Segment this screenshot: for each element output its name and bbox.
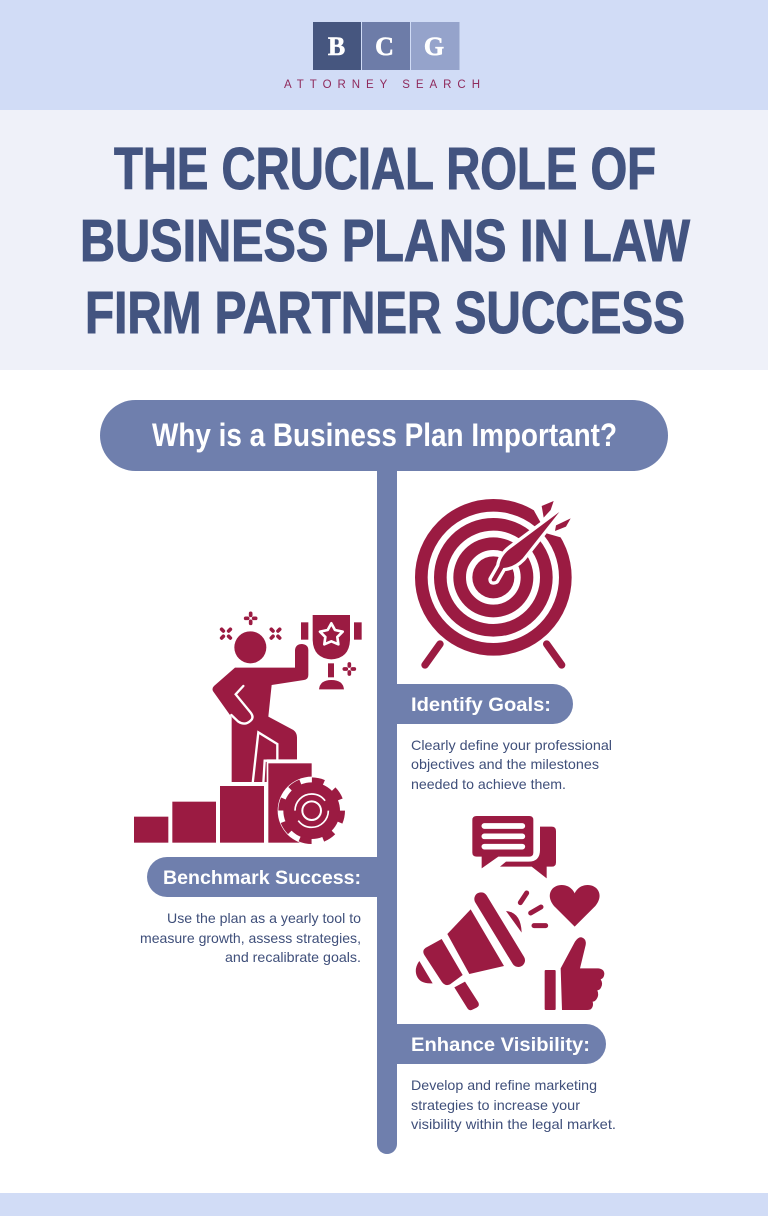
logo: BCG squares: G bbox=[424, 32, 444, 61]
vertical timeline stem bbox=[377, 460, 397, 1154]
logo wordmark: ATTORNEY SEARCH bbox=[284, 79, 480, 91]
description: measure growth, assess strategies, bbox=[140, 931, 361, 946]
label pill bbox=[397, 684, 573, 724]
title bbox=[80, 136, 690, 346]
footer band bbox=[0, 1193, 768, 1216]
title band bbox=[0, 110, 768, 370]
header band with logo bbox=[0, 0, 768, 110]
logo: BCG squares: C bbox=[375, 32, 394, 61]
icon: chat bubbles, megaphone, heart and thumbs up bbox=[416, 816, 604, 1010]
icon: person on steps with trophy and gear bbox=[134, 613, 362, 845]
chat bubbles bbox=[472, 816, 556, 878]
logo: BCG squares: B bbox=[328, 32, 345, 61]
description bbox=[411, 1078, 616, 1132]
trophy bbox=[301, 615, 362, 689]
description bbox=[411, 738, 612, 792]
label pill bbox=[147, 857, 377, 897]
description: objectives and the milestones bbox=[411, 757, 599, 772]
description: strategies to increase your bbox=[411, 1098, 580, 1113]
heart bbox=[550, 885, 600, 927]
description: Clearly define your professional bbox=[411, 738, 612, 753]
goal: enhance visibility bbox=[397, 1024, 616, 1132]
description: Develop and refine marketing bbox=[411, 1078, 597, 1093]
thumbs up bbox=[545, 937, 604, 1010]
description: Use the plan as a yearly tool to bbox=[167, 911, 361, 926]
label pill: Benchmark Success: bbox=[163, 868, 361, 889]
label pill: Enhance Visibility: bbox=[411, 1035, 590, 1056]
label pill: Identify Goals: bbox=[411, 695, 551, 716]
heading pill bbox=[100, 400, 668, 471]
megaphone bbox=[416, 893, 546, 1010]
goal: identify goals bbox=[397, 684, 612, 792]
description: needed to achieve them. bbox=[411, 777, 566, 792]
sparkles bbox=[222, 613, 354, 674]
label pill bbox=[397, 1024, 606, 1064]
heading pill: Why is a Business Plan Important? bbox=[152, 417, 617, 453]
gear bbox=[278, 777, 346, 845]
logo: BCG squares bbox=[313, 22, 460, 70]
description: and recalibrate goals. bbox=[225, 950, 361, 965]
icon: target with arrow bbox=[421, 497, 577, 665]
goal: benchmark success bbox=[140, 857, 377, 965]
description: visibility within the legal market. bbox=[411, 1117, 616, 1132]
description bbox=[140, 911, 361, 965]
